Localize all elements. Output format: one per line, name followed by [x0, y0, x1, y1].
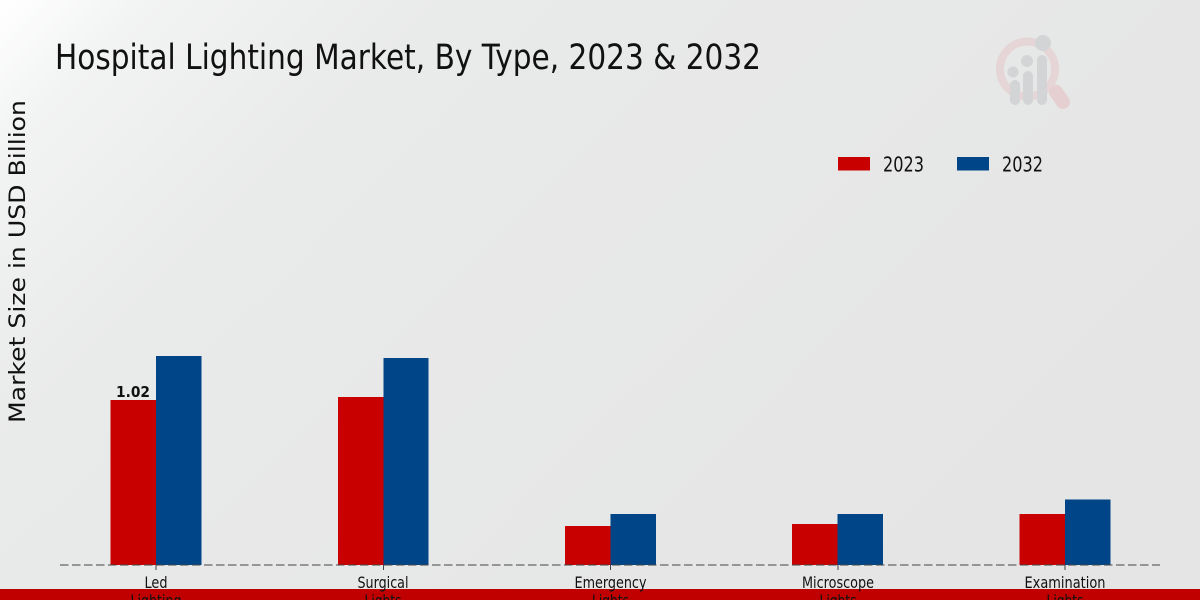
legend swatch 2032 — [957, 157, 989, 170]
label: Surgical Lights: Surgical — [358, 573, 408, 592]
footer bar — [0, 589, 1200, 600]
label: Examination Lights — [1024, 573, 1106, 600]
icon: magnifier ring — [1000, 42, 1055, 96]
icon: magnifier handle — [1056, 92, 1063, 102]
label: Led Lighting: Led — [144, 573, 168, 592]
label: Led Lighting — [130, 573, 182, 600]
legend label 2032: 2032 — [1002, 152, 1043, 176]
bars: Emergency Lights — [565, 514, 656, 565]
bars: Examination Lights — [1020, 500, 1110, 565]
label: Surgical Lights — [358, 573, 408, 600]
title: Hospital Lighting Market, By Type, 2023 & 2032 — [55, 38, 761, 78]
category labels — [130, 573, 1106, 600]
label: Microscope Lights: Microscope — [802, 573, 874, 592]
value label 1.02: 1.02 — [116, 383, 150, 401]
legend — [838, 152, 1043, 176]
label: Emergency Lights — [574, 573, 646, 600]
label: Emergency Lights: Emergency — [574, 573, 646, 592]
icon: bars and dots — [1008, 35, 1051, 105]
legend label 2023: 2023 — [883, 152, 924, 176]
bars: Led Lighting — [110, 356, 202, 565]
label: Microscope Lights — [802, 573, 874, 600]
label: Examination Lights: Examination — [1024, 573, 1106, 592]
icon: watermark logo — [1000, 35, 1063, 105]
y axis label: Market Size in USD Billion — [6, 100, 31, 423]
bars: Surgical Lights — [338, 358, 428, 565]
bars: Microscope Lights — [792, 514, 883, 565]
legend swatch 2023 — [838, 157, 870, 170]
bar chart — [60, 356, 1160, 570]
